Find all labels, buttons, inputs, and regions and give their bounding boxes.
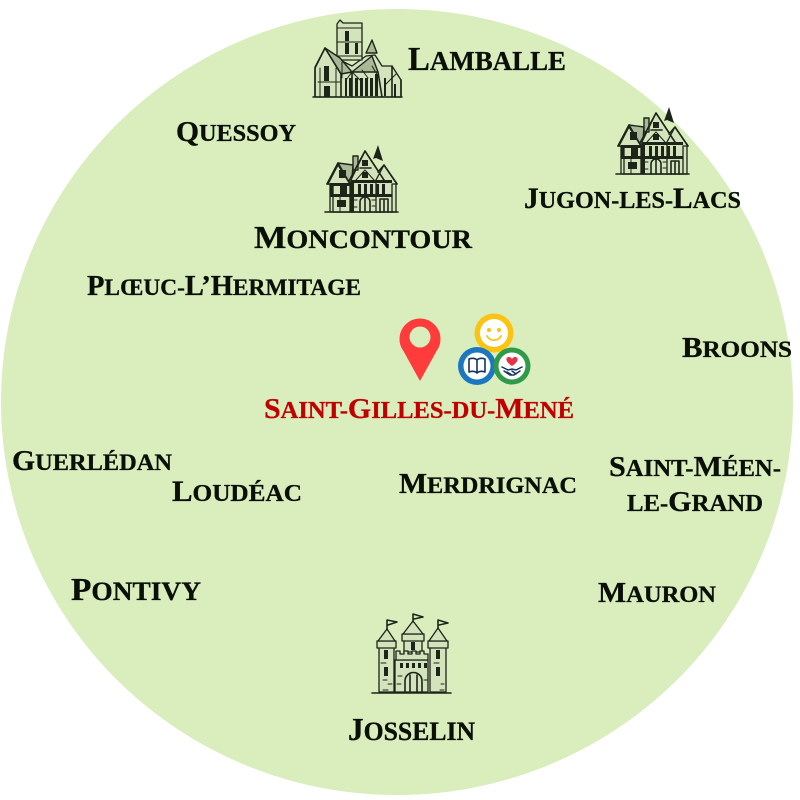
label: Jugon-les-Lacs: JUGON-LES-LACS bbox=[524, 182, 741, 215]
icon: Moncontour half-timbered house bbox=[325, 145, 398, 212]
label: Josselin: JOSSELIN bbox=[348, 711, 475, 747]
label: Lamballe: LAMBALLE bbox=[408, 41, 566, 78]
label: Plœuc-L'Hermitage: PLŒUC-L’HERMITAGE bbox=[87, 271, 361, 302]
label: Pontivy: PONTIVY bbox=[71, 571, 201, 607]
icon: three-circle logo bbox=[458, 314, 530, 385]
label: Merdrignac: MERDRIGNAC bbox=[399, 469, 577, 500]
label: Loudéac: LOUDÉAC bbox=[172, 475, 302, 508]
label: Mauron: MAURON bbox=[598, 578, 716, 609]
label: Saint-Méen-le-Grand bbox=[609, 451, 781, 518]
icon: yellow smiley circle bbox=[474, 314, 514, 352]
label: Quessoy: QUESSOY bbox=[176, 116, 296, 148]
label: Broons: BROONS bbox=[682, 333, 792, 364]
icon: Jugon-les-Lacs half-timbered house bbox=[616, 107, 689, 174]
label: Saint-Méen-le-Grand: LE-GRAND bbox=[627, 486, 763, 518]
icon: red location pin bbox=[400, 319, 440, 380]
icon: Josselin castle bbox=[372, 614, 451, 693]
icon: blue book circle bbox=[458, 347, 496, 385]
icon: green handshake and heart circle bbox=[494, 348, 530, 384]
label: Saint-Gilles-du-Mené: SAINT-GILLES-DU-MENÉ bbox=[264, 393, 574, 425]
label: Guerlédan: GUERLÉDAN bbox=[12, 446, 172, 477]
label: Moncontour: MONCONTOUR bbox=[254, 219, 473, 255]
icon: Lamballe church bbox=[313, 20, 402, 97]
label: Saint-Méen-le-Grand: SAINT-MÉEN- bbox=[609, 451, 781, 483]
